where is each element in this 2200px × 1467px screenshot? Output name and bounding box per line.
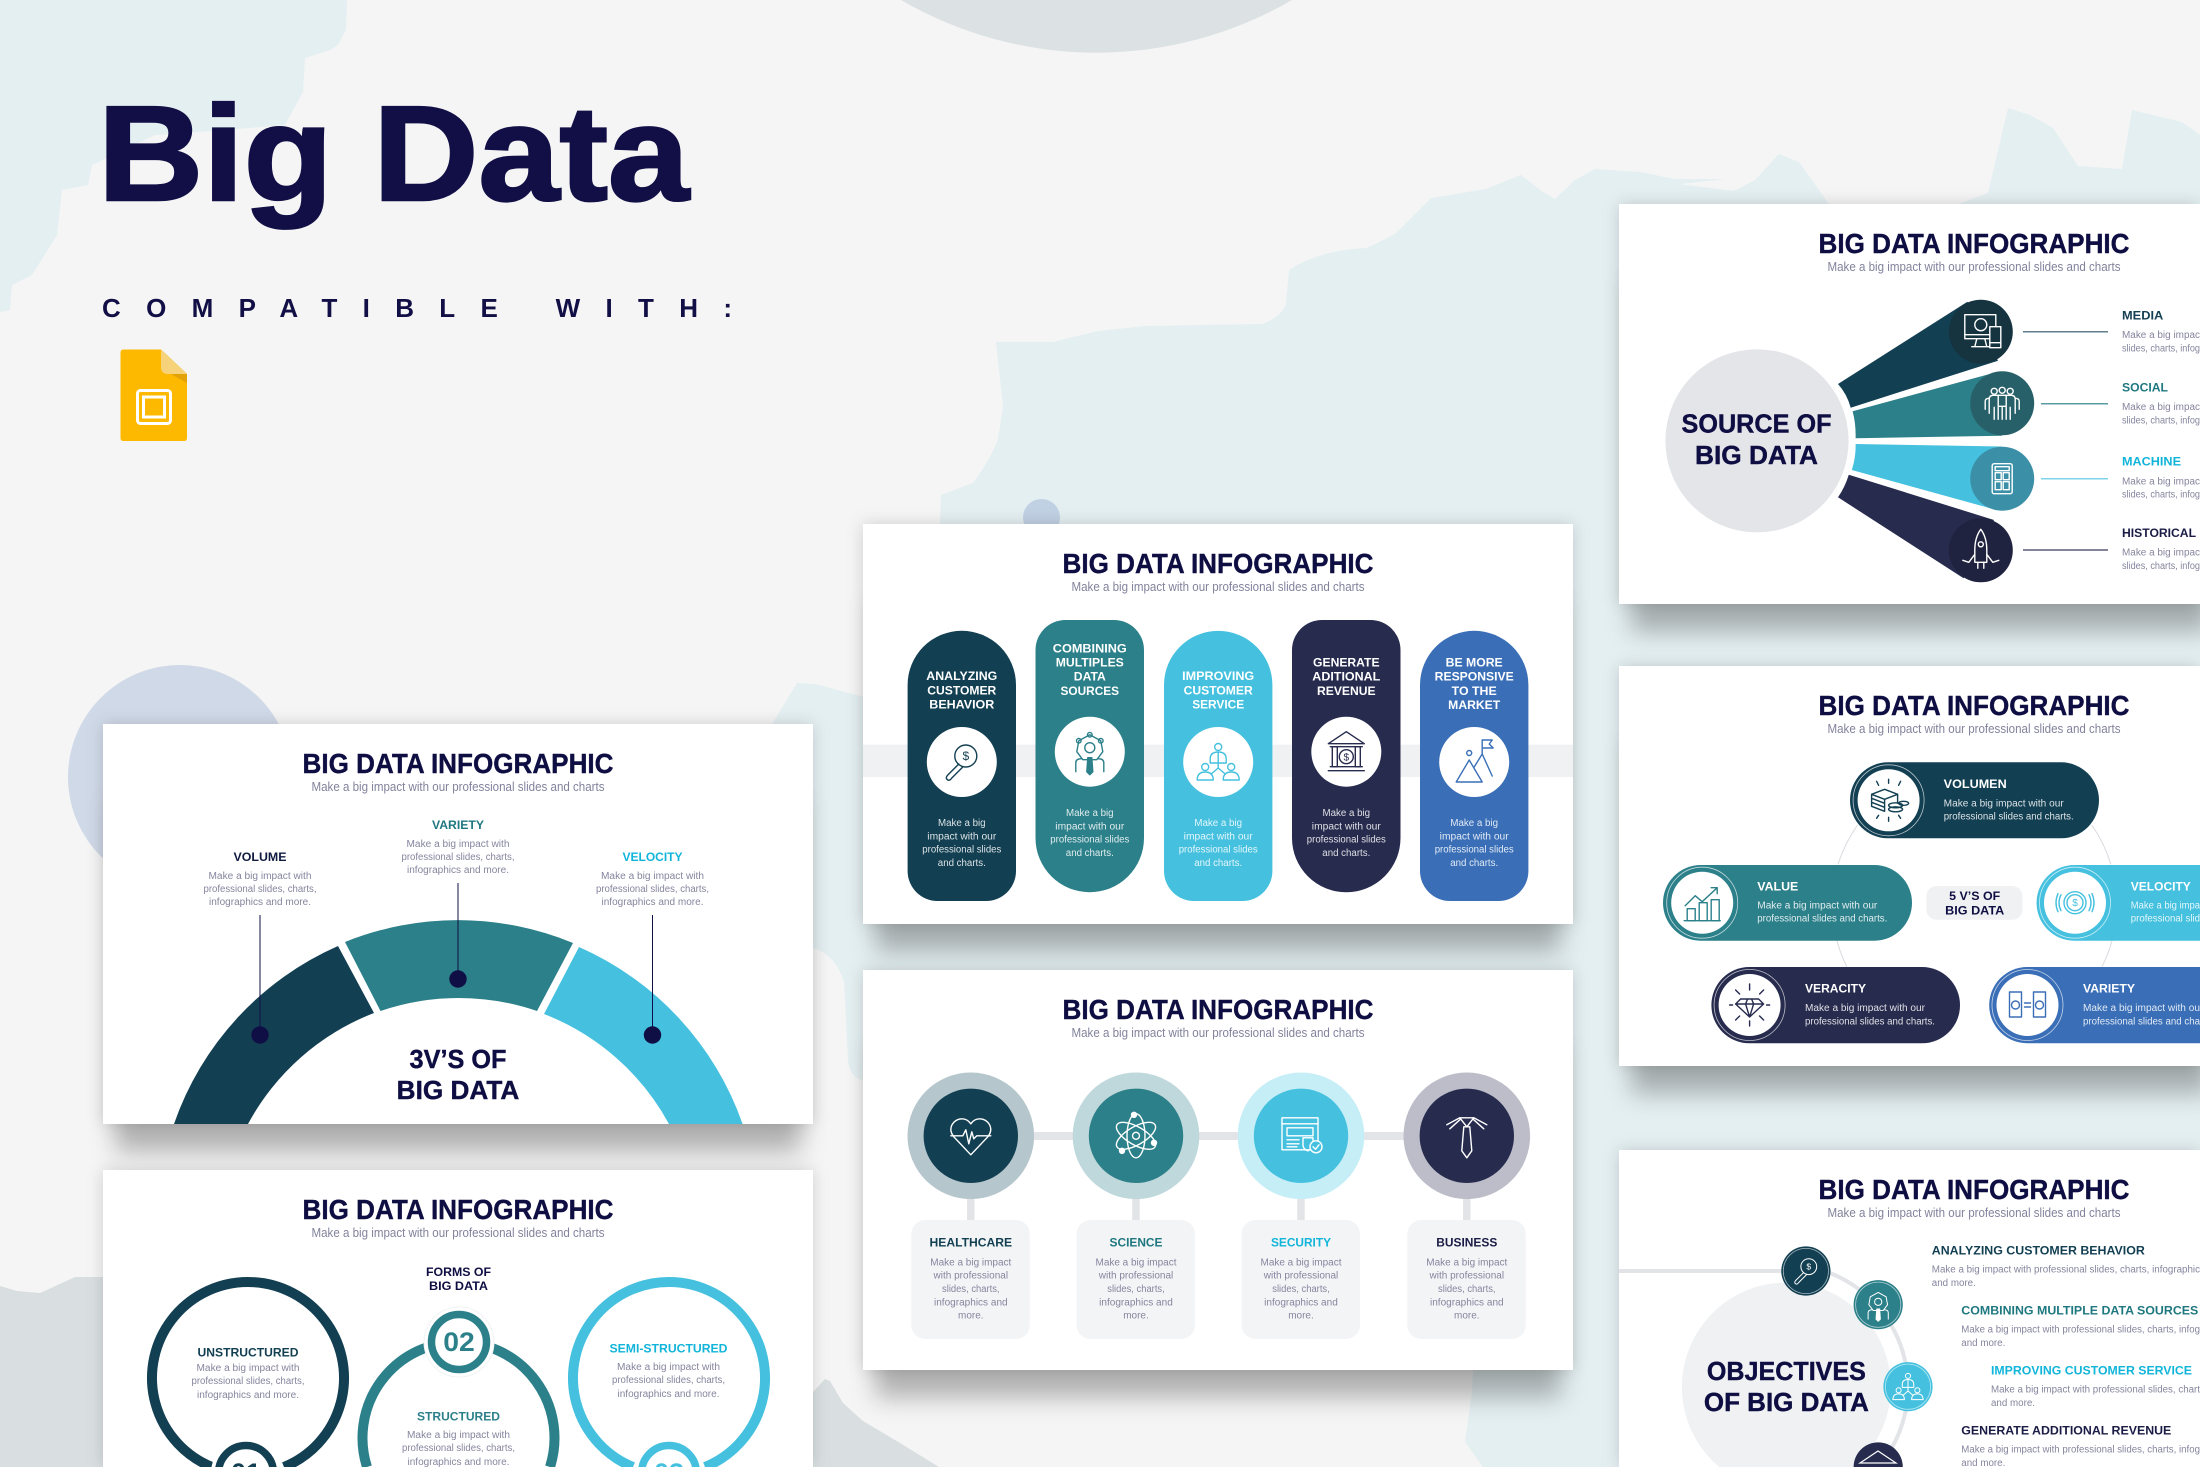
text block: volume: infographics and more. — [209, 897, 311, 908]
pill: be more responsive to the market: BE MORE — [1446, 656, 1503, 670]
pointer: volume — [251, 915, 269, 1044]
node: security: slides, charts, — [1272, 1284, 1330, 1295]
connector lines — [2023, 332, 2108, 550]
icon: Google Slides file — [120, 350, 187, 441]
pill: combining multiples data sources: MULTIPLES — [1056, 656, 1124, 670]
text block: variety: infographics and more. — [407, 865, 509, 876]
pill: veracity: VERACITY — [1805, 982, 1866, 996]
list item: improving customer service — [1991, 1363, 2200, 1409]
center label: BIG DATA — [397, 1075, 520, 1105]
pill: velocity — [2037, 865, 2200, 941]
subheading: Make a big impact with our professional slides and charts — [1828, 1206, 2120, 1220]
main title: Big Data — [98, 78, 690, 229]
text block: social — [2122, 380, 2200, 426]
heading: BIG DATA INFOGRAPHIC — [1062, 994, 1374, 1025]
pill: analyzing customer behavior: Make a big — [938, 818, 986, 829]
heading: BIG DATA INFOGRAPHIC — [1818, 1174, 2130, 1205]
panel: source of big data — [1619, 204, 2200, 604]
text block: unstructured: Make a big impact with — [196, 1363, 300, 1374]
text block: semi-structured — [610, 1342, 728, 1400]
node: security: with professional — [1263, 1271, 1338, 1282]
pill: combining multiples data sources: COMBINING — [1053, 641, 1127, 655]
pill: be more responsive to the market: and charts. — [1450, 858, 1498, 869]
center circle: BIG DATA — [1695, 440, 1818, 470]
pill: be more responsive to the market: Make a big — [1450, 818, 1498, 829]
panel: industries timeline — [863, 970, 1573, 1370]
pill: analyzing customer behavior: BEHAVIOR — [929, 698, 995, 712]
text block: structured: STRUCTURED — [417, 1410, 500, 1424]
label: forms of big data — [426, 1265, 491, 1293]
list item: improving customer service: and more. — [1991, 1398, 2035, 1409]
pill: improving customer service: SERVICE — [1192, 698, 1244, 712]
pill: improving customer service: and charts. — [1194, 858, 1242, 869]
panel: 5 V's of big data — [1619, 666, 2200, 1066]
pill: value: Make a big impact with our — [1757, 900, 1878, 911]
subheading: Make a big impact with our professional slides and charts — [312, 1226, 604, 1240]
pointer: variety — [449, 883, 467, 988]
list item: analyzing customer behavior — [1932, 1243, 2200, 1289]
pill: velocity: $ — [2072, 898, 2078, 909]
node: business: infographics and — [1430, 1297, 1504, 1308]
pill: veracity: professional slides and charts. — [1805, 1016, 1935, 1027]
icon: combining — [1854, 1280, 1903, 1329]
center circle: OF BIG DATA — [1704, 1387, 1869, 1417]
pill: combining multiples data sources: and charts. — [1066, 848, 1114, 859]
pill: variety: VARIETY — [2083, 982, 2135, 996]
text block: unstructured: UNSTRUCTURED — [198, 1346, 299, 1360]
heading: BIG DATA INFOGRAPHIC — [1818, 228, 2130, 259]
node: security: SECURITY — [1271, 1236, 1331, 1250]
node: healthcare: HEALTHCARE — [930, 1236, 1012, 1250]
heading: BIG DATA INFOGRAPHIC — [1062, 548, 1374, 579]
pill: be more responsive to the market: RESPONSIVE — [1435, 670, 1514, 684]
pointer: velocity — [644, 915, 661, 1044]
text block: structured: professional slides, charts, — [402, 1443, 515, 1454]
pill: improving customer service: IMPROVING — [1182, 669, 1254, 683]
text block: unstructured — [192, 1346, 304, 1401]
pill: veracity: Make a big impact with our — [1805, 1003, 1926, 1014]
pill: volumen: professional slides and charts. — [1944, 812, 2074, 823]
pill: value: professional slides and charts. — [1757, 914, 1887, 925]
pill: analyzing customer behavior: $ — [962, 749, 969, 763]
node: business: more. — [1454, 1311, 1480, 1322]
pill: analyzing customer behavior: ANALYZING — [926, 669, 997, 683]
text block: semi-structured: Make a big impact with — [617, 1362, 720, 1373]
ring: semi-structured — [573, 1282, 765, 1467]
pill: generate aditional revenue: REVENUE — [1317, 684, 1376, 698]
pill: analyzing customer behavior: and charts. — [938, 858, 986, 869]
pill: be more responsive to the market: professional slides — [1435, 845, 1514, 856]
node: science: SCIENCE — [1110, 1236, 1162, 1250]
center label: 5 V’S OF — [1949, 889, 2000, 903]
pill: generate aditional revenue: impact with our — [1312, 821, 1381, 832]
list item: analyzing customer behavior: ANALYZING CUSTOMER BEHAVIOR — [1932, 1243, 2145, 1257]
node: healthcare: with professional — [933, 1271, 1008, 1282]
pill: veracity — [1711, 967, 1960, 1043]
node: science: more. — [1123, 1311, 1149, 1322]
pill: combining multiples data sources: SOURCES — [1061, 684, 1119, 698]
list item: improving customer service: Make a big impact with professional slides, chart — [1991, 1385, 2200, 1396]
label: forms of big data: FORMS OF — [426, 1265, 491, 1279]
pill: be more responsive to the market: TO THE — [1452, 684, 1497, 698]
text block: variety: professional slides, charts, — [402, 852, 514, 863]
subheading: Make a big impact with our professional slides and charts — [1828, 260, 2120, 274]
text block: media: MEDIA — [2122, 308, 2164, 322]
text block: structured — [402, 1410, 515, 1467]
node: business: BUSINESS — [1436, 1236, 1497, 1250]
pill: combining multiples data sources: Make a big — [1066, 808, 1114, 819]
text block: historical: HISTORICAL — [2122, 526, 2196, 540]
node: science — [1073, 1072, 1199, 1339]
subtitle: compatible with: COMPATIBLE WITH: — [102, 293, 732, 323]
pill: generate aditional revenue: professional slides — [1307, 835, 1386, 846]
icon: analyzing — [1781, 1246, 1830, 1296]
text block: unstructured: infographics and more. — [197, 1390, 299, 1401]
node: business: Make a big impact — [1426, 1257, 1508, 1268]
pill: analyzing customer behavior: CUSTOMER — [927, 683, 997, 697]
pill: generate aditional revenue: ADITIONAL — [1312, 670, 1380, 684]
center circle — [1665, 349, 1849, 532]
beam: machine — [1852, 444, 2034, 511]
text block: semi-structured: professional slides, charts, — [612, 1375, 725, 1386]
node: science: infographics and — [1099, 1297, 1173, 1308]
icon: generate — [1854, 1442, 1903, 1467]
ring: structured — [362, 1307, 554, 1467]
pill: analyzing customer behavior: impact with our — [927, 831, 997, 842]
text block: velocity: infographics and more. — [602, 897, 704, 908]
pill: be more responsive to the market: impact with our — [1440, 831, 1509, 842]
node: business: slides, charts, — [1438, 1284, 1496, 1295]
pill: generate aditional revenue: Make a big — [1322, 808, 1370, 819]
text block: machine: MACHINE — [2122, 455, 2181, 469]
pill: generate aditional revenue: $ — [1344, 753, 1350, 764]
panel: objectives of big data — [1619, 1150, 2200, 1467]
pill: generate aditional revenue — [1292, 620, 1400, 892]
heading: BIG DATA INFOGRAPHIC — [302, 748, 614, 779]
list item: generate additional revenue — [1961, 1423, 2200, 1467]
pill: value: VALUE — [1757, 880, 1798, 894]
pill: variety — [1989, 967, 2200, 1043]
icon: analyzing: $ — [1806, 1262, 1811, 1272]
pill: combining multiples data sources: impact with our — [1055, 821, 1125, 832]
subheading: Make a big impact with our professional slides and charts — [1072, 580, 1364, 594]
pill: be more responsive to the market: MARKET — [1448, 698, 1501, 712]
node: healthcare: infographics and — [934, 1297, 1008, 1308]
node: security: infographics and — [1264, 1297, 1338, 1308]
node: business: with professional — [1429, 1271, 1504, 1282]
pill: volumen — [1850, 762, 2099, 838]
pill: improving customer service: CUSTOMER — [1184, 683, 1253, 697]
text block: machine — [2122, 455, 2200, 501]
pill: velocity: VELOCITY — [2131, 880, 2191, 894]
subheading: Make a big impact with our professional slides and charts — [1072, 1026, 1364, 1040]
pill: combining multiples data sources — [1036, 620, 1144, 892]
node: security: more. — [1288, 1311, 1314, 1322]
beam: social — [1853, 371, 2034, 438]
pill: analyzing customer behavior: professional slides — [922, 845, 1001, 856]
list item: generate additional revenue: GENERATE ADDITIONAL REVENUE — [1961, 1423, 2171, 1437]
text block: structured: Make a big impact with — [407, 1430, 510, 1441]
pill: improving customer service: professional slides — [1179, 845, 1258, 856]
text block: semi-structured: SEMI-STRUCTURED — [610, 1342, 728, 1356]
center circle: OBJECTIVES — [1707, 1356, 1866, 1386]
text block: machine: Make a big impac — [2122, 476, 2200, 487]
text block: semi-structured: infographics and more. — [618, 1389, 720, 1400]
text block: velocity: Make a big impact with — [601, 871, 704, 882]
list item: combining multiple data sources: and more. — [1961, 1338, 2005, 1349]
subheading: Make a big impact with our professional slides and charts — [312, 780, 604, 794]
center label: 3V’S OF — [410, 1044, 506, 1074]
text block: velocity: VELOCITY — [622, 850, 682, 864]
pill: combining multiples data sources: professional slides — [1050, 835, 1129, 846]
list item: analyzing customer behavior: and more. — [1932, 1278, 1976, 1289]
center circle: SOURCE OF — [1682, 408, 1832, 438]
text block: media: Make a big impac — [2122, 330, 2200, 341]
pill: volumen: VOLUMEN — [1944, 777, 2007, 791]
ring: structured: 02 — [443, 1327, 475, 1357]
center label: BIG DATA — [1945, 903, 2005, 917]
text block: variety: VARIETY — [432, 818, 484, 832]
ring: unstructured — [152, 1282, 344, 1467]
node: healthcare: more. — [958, 1311, 984, 1322]
pill: generate aditional revenue: and charts. — [1322, 848, 1370, 859]
node: healthcare: slides, charts, — [942, 1284, 1000, 1295]
label: forms of big data: BIG DATA — [429, 1279, 488, 1293]
text block: media — [2122, 308, 2200, 354]
pill: analyzing customer behavior — [908, 631, 1016, 901]
panel: 3V's of big data — [103, 724, 813, 1124]
center label — [1926, 886, 2022, 920]
pill: improving customer service: impact with our — [1184, 831, 1253, 842]
pill: improving customer service: Make a big — [1194, 818, 1242, 829]
node: science: slides, charts, — [1107, 1284, 1165, 1295]
text block: volume: Make a big impact with — [208, 871, 312, 882]
node: science: Make a big impact — [1096, 1257, 1177, 1268]
pill: volumen: Make a big impact with our — [1944, 798, 2064, 809]
list item: improving customer service: IMPROVING CUSTOMER SERVICE — [1991, 1363, 2192, 1377]
text block: social: Make a big impac — [2122, 402, 2200, 413]
panel: forms of big data — [103, 1170, 813, 1467]
node: science: with professional — [1098, 1271, 1173, 1282]
pill: combining multiples data sources: DATA — [1074, 670, 1106, 684]
text block: volume — [204, 850, 316, 908]
arc chart — [174, 920, 743, 1124]
center circle — [1682, 1282, 1891, 1467]
beam: media — [1838, 300, 2013, 408]
node: healthcare — [908, 1072, 1034, 1339]
text block: volume: VOLUME — [234, 850, 286, 864]
heading: BIG DATA INFOGRAPHIC — [1818, 690, 2130, 721]
beam: historical — [1838, 475, 2013, 582]
node: business — [1404, 1072, 1530, 1339]
text block: historical: Make a big impac — [2122, 548, 2200, 559]
subheading: Make a big impact with our professional slides and charts — [1828, 722, 2120, 736]
text block: velocity: professional slides, charts, — [596, 884, 709, 895]
text block: variety — [402, 818, 514, 876]
center label — [397, 1044, 520, 1105]
pill: improving customer service — [1164, 631, 1272, 901]
pill: variety: Make a big impact with ou — [2083, 1003, 2200, 1014]
node: healthcare: Make a big impact — [930, 1257, 1012, 1268]
text block: historical — [2122, 526, 2200, 572]
node: security: Make a big impact — [1260, 1257, 1342, 1268]
pill: value — [1663, 865, 1912, 941]
text block: social: SOCIAL — [2122, 380, 2168, 394]
text block: variety: Make a big impact with — [406, 839, 510, 850]
text block: unstructured: professional slides, charts, — [192, 1376, 304, 1387]
list item: combining multiple data sources — [1961, 1303, 2200, 1349]
heading: BIG DATA INFOGRAPHIC — [302, 1194, 614, 1225]
panel: five pills — [863, 524, 1573, 924]
text block: velocity — [596, 850, 709, 908]
list item: combining multiple data sources: COMBINING MULTIPLE DATA SOURCES — [1961, 1303, 2198, 1317]
node: security — [1238, 1072, 1364, 1339]
icon: improving — [1883, 1362, 1933, 1411]
list item: analyzing customer behavior: Make a big impact with professional slides, charts, infographic — [1932, 1265, 2200, 1276]
pill: be more responsive to the market — [1420, 631, 1528, 901]
text block: volume: professional slides, charts, — [204, 884, 316, 895]
pill: generate aditional revenue: GENERATE — [1313, 656, 1380, 670]
